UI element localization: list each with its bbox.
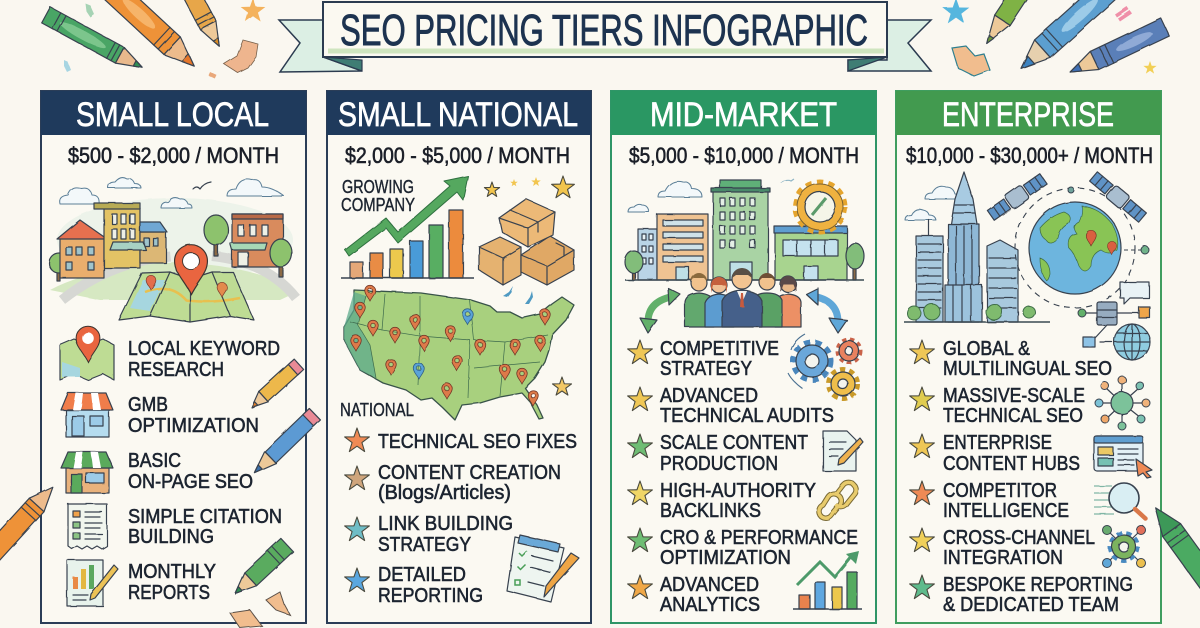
icon: blue star: [943, 0, 969, 23]
item text: BESPOKE REPORTING: [943, 573, 1133, 596]
item text: ENTERPRISE: [943, 431, 1052, 454]
side icons: [788, 334, 863, 609]
icon: green crayon: [979, 0, 1030, 48]
panel frame: [327, 91, 591, 623]
icon: yellow pencil: [247, 359, 304, 413]
icon: green crayon: [42, 7, 147, 76]
star bullet: [628, 481, 652, 505]
location pins: [351, 285, 550, 406]
cloud: [60, 188, 99, 204]
gear: [796, 183, 844, 231]
price: $500 - $2,000 / MONTH: [68, 143, 279, 168]
blue fragments: [503, 286, 533, 304]
orange node: [1139, 307, 1150, 318]
awning: [110, 242, 146, 250]
bird: [193, 182, 211, 189]
person: [753, 273, 782, 327]
axis: [341, 277, 474, 279]
icon: integration gear: [1102, 526, 1146, 568]
icon: clipboard with pencil: [507, 535, 579, 602]
globe pin: [1107, 241, 1117, 255]
shavings: [952, 46, 990, 76]
item text: MULTILINGUAL SEO: [943, 357, 1112, 380]
skyscraper left: [916, 220, 943, 322]
left blue building: [638, 229, 657, 280]
crayon shavings: [224, 40, 258, 73]
blue pins: [414, 309, 473, 379]
item text: COMPETITIVE: [660, 337, 779, 360]
price: $5,000 - $10,000 / MONTH: [629, 143, 859, 168]
panel: enterprise: [896, 91, 1200, 623]
icon: store: [61, 393, 113, 437]
blue cycle arrow: [806, 288, 847, 333]
item text: CONTENT CREATION: [378, 461, 561, 484]
illustration: skyline and global network: [904, 170, 1150, 360]
bird: [781, 179, 794, 183]
globe: [1029, 202, 1121, 294]
icon: browser window: [1094, 436, 1152, 478]
box bottom right: [521, 236, 574, 285]
item text: STRATEGY: [378, 533, 471, 556]
icon: yellow star: [1143, 61, 1157, 74]
banner right tail: [848, 20, 931, 71]
star bullet: [910, 528, 934, 552]
rotation arrows: [788, 334, 805, 388]
empire tower: [945, 172, 982, 322]
header band: [611, 91, 876, 135]
icon: yellow gear: [829, 370, 857, 398]
tree: [846, 243, 864, 280]
cloud: [161, 198, 192, 208]
item text: STRATEGY: [660, 357, 752, 380]
icon: dark blue crayon: [1066, 18, 1169, 81]
item text: MASSIVE-SCALE: [943, 384, 1085, 407]
star bullet: [345, 517, 369, 541]
icon: map with pin: [60, 326, 114, 380]
item text: TECHNICAL SEO FIXES: [378, 430, 577, 453]
panel: mid-market: [611, 91, 876, 623]
blue speck: [64, 60, 71, 72]
satellite left: [986, 172, 1048, 222]
icon: document with pencil: [823, 431, 863, 471]
star: [484, 182, 500, 196]
star bullet: [628, 387, 652, 411]
map pin small: [217, 282, 227, 297]
item text: SCALE CONTENT: [660, 431, 808, 454]
panel frame: [611, 91, 876, 623]
cloud: [905, 209, 936, 220]
heading: ENTERPRISE: [942, 96, 1114, 134]
satellite right: [1088, 170, 1148, 224]
blue node: [1083, 337, 1095, 347]
dashed orbit: [1015, 188, 1135, 308]
folded map: [119, 272, 254, 322]
icon: orange crayon: [0, 481, 60, 574]
item text: RESEARCH: [128, 358, 224, 381]
banner wash: [328, 48, 884, 54]
person: [775, 276, 801, 327]
star: [531, 177, 541, 186]
item text: BASIC: [128, 449, 181, 472]
box bottom left: [479, 237, 521, 285]
item text: INTELLIGENCE: [943, 499, 1069, 522]
item text: SIMPLE CITATION: [128, 505, 282, 528]
item text: ADVANCED: [660, 384, 758, 407]
continents: [1040, 206, 1118, 280]
item text: CONTENT HUBS: [943, 452, 1080, 475]
person: [705, 277, 734, 327]
top node: [1068, 187, 1074, 193]
decorative pencils: [0, 359, 320, 628]
header band: [896, 91, 1161, 135]
header band: [41, 91, 306, 135]
speck: [208, 72, 216, 79]
star bullet: [628, 528, 652, 552]
tree: [625, 251, 643, 280]
team of people: [685, 268, 801, 327]
pencil: [544, 553, 579, 597]
person lead: [722, 268, 762, 327]
map outline: [344, 290, 574, 420]
cloud: [628, 204, 649, 212]
item text: BACKLINKS: [660, 499, 761, 522]
trees: [907, 304, 1035, 320]
green speck: [85, 3, 94, 17]
list: services: [910, 337, 1133, 616]
green node: [1078, 309, 1086, 317]
illustration: offices and team: [625, 179, 864, 333]
price: $10,000 - $30,000+ / MONTH: [906, 143, 1153, 168]
icon: orange crayon: [104, 0, 202, 75]
icon: red gear: [838, 340, 860, 362]
bar: [449, 210, 463, 278]
icon: blue crayon: [1013, 0, 1116, 77]
item text: (Blogs/Articles): [378, 481, 511, 504]
banner right fold: [848, 57, 887, 71]
item text: MONTHLY: [128, 560, 216, 583]
icon: magnifier: [1094, 483, 1146, 519]
icon: monthly report: [67, 560, 118, 606]
icon: analytics chart: [793, 551, 862, 609]
list lines: [528, 556, 553, 586]
panel: small national: [327, 91, 591, 623]
ground line: [625, 279, 864, 281]
west coast wash: [344, 292, 376, 378]
box top: [499, 199, 555, 247]
item text: PRODUCTION: [660, 452, 778, 475]
item text: TECHNICAL SEO: [943, 404, 1083, 427]
dash link and node: [1124, 246, 1149, 254]
icon: small yellow crayon: [184, 0, 227, 50]
crayons top right: [943, 0, 1169, 81]
road left: [62, 256, 170, 300]
blue roof building: [140, 222, 167, 263]
icon: green store: [61, 452, 113, 493]
icon: green pencil: [229, 538, 293, 600]
banner left fold: [323, 57, 362, 71]
checklist: [515, 551, 527, 585]
clipboard: [507, 537, 564, 602]
cloud: [658, 181, 702, 197]
shavings: [230, 610, 262, 628]
map: united states: [344, 285, 574, 420]
header band: [327, 91, 591, 135]
star: [552, 176, 574, 198]
item text: INTEGRATION: [943, 546, 1063, 569]
item text: OPTIMIZATION: [128, 414, 259, 437]
star bullet: [910, 434, 934, 458]
title: SEO PRICING TIERS INFOGRAPHIC: [340, 6, 868, 55]
heading: SMALL LOCAL: [76, 96, 269, 134]
star bullet: [628, 434, 652, 458]
list: services: [60, 326, 282, 606]
house: [57, 220, 107, 278]
item text: OPTIMIZATION: [660, 546, 791, 569]
chat bubble: [1120, 282, 1149, 304]
panel: small local: [0, 91, 320, 628]
title banner: [279, 2, 931, 72]
cloud: [925, 186, 962, 199]
big location pin: [175, 245, 207, 294]
item text: TECHNICAL AUDITS: [660, 404, 834, 427]
item text: DETAILED: [378, 563, 466, 586]
icon: orange star: [241, 0, 265, 22]
item text: REPORTS: [128, 581, 210, 604]
ground: [50, 262, 297, 300]
panel frame: [41, 91, 306, 623]
bar: [370, 253, 383, 278]
icon: green crayon: [1146, 501, 1200, 596]
skyscraper right: [987, 240, 1018, 322]
right building: [774, 226, 847, 280]
item text: LINK BUILDING: [378, 512, 513, 535]
label national: NATIONAL: [340, 400, 414, 420]
banner left tail: [279, 20, 362, 72]
icon: blue gear: [794, 343, 830, 379]
item text: ADVANCED: [660, 573, 759, 596]
haze: [57, 198, 293, 282]
clip: [518, 535, 560, 552]
globe pin: [1086, 230, 1096, 246]
cloud: [227, 179, 284, 196]
star bullet: [910, 481, 934, 505]
list: services: [345, 428, 577, 607]
heading: SMALL NATIONAL: [338, 96, 578, 134]
icon: citation list: [68, 504, 107, 549]
banner body: [323, 2, 887, 57]
crayons top left: [42, 0, 265, 79]
bar: [429, 225, 443, 278]
orange building: [657, 214, 708, 280]
star: [510, 179, 518, 186]
icon: blue pencil: [249, 408, 320, 478]
star bullet: [345, 466, 369, 490]
icon: wire globe: [1114, 324, 1150, 360]
side icons: [1094, 376, 1200, 596]
item text: GLOBAL &: [943, 337, 1030, 360]
star bullet: [628, 575, 652, 599]
green cycle arrow: [640, 288, 680, 333]
ground line: [904, 321, 1050, 323]
database: [1097, 302, 1117, 325]
item text: ANALYTICS: [660, 593, 760, 616]
illustration: town and map: [49, 178, 297, 322]
bar: [390, 249, 403, 278]
bar: [410, 241, 423, 278]
star bullet: [910, 575, 934, 599]
star: [552, 377, 572, 395]
list: services: [628, 337, 858, 616]
tall green building: [711, 180, 770, 280]
road right: [212, 256, 296, 298]
pink mark: [1116, 8, 1131, 20]
brick building: [230, 214, 283, 267]
heading: MID-MARKET: [650, 96, 837, 134]
item text: BUILDING: [128, 525, 214, 548]
label growing: GROWING: [342, 177, 414, 197]
map pin small: [146, 275, 156, 290]
tree: [49, 253, 69, 281]
label company: COMPANY: [341, 195, 415, 215]
cloud: [108, 178, 141, 188]
star bullet: [910, 340, 934, 364]
price: $2,000 - $5,000 / MONTH: [345, 143, 570, 168]
item text: CROSS-CHANNEL: [943, 526, 1095, 549]
item text: HIGH-AUTHORITY: [660, 479, 816, 502]
shavings: [266, 592, 290, 615]
tree: [270, 239, 292, 277]
stars: [484, 176, 574, 198]
bar: [350, 262, 363, 278]
icon: network hub: [1095, 376, 1150, 430]
item text: GMB: [128, 393, 168, 416]
yellow building: [94, 203, 140, 268]
state lines: [350, 294, 548, 398]
tree: [204, 215, 228, 256]
star bullet: [345, 428, 369, 452]
item text: CRO & PERFORMANCE: [660, 526, 858, 549]
item text: LOCAL KEYWORD: [128, 337, 280, 360]
star bullet: [910, 387, 934, 411]
item text: REPORTING: [378, 584, 483, 607]
bar chart: [341, 176, 474, 278]
icon: stacked boxes: [479, 199, 574, 285]
person: [685, 273, 714, 327]
star bullet: [628, 340, 652, 364]
item text: COMPETITOR: [943, 479, 1057, 502]
icon: chain link: [819, 482, 856, 518]
star bullet: [345, 568, 369, 592]
item text: ON-PAGE SEO: [128, 470, 253, 493]
item text: & DEDICATED TEAM: [943, 593, 1119, 616]
network links: [1086, 313, 1139, 342]
growth arrow: [345, 176, 468, 256]
panel frame: [896, 91, 1161, 623]
